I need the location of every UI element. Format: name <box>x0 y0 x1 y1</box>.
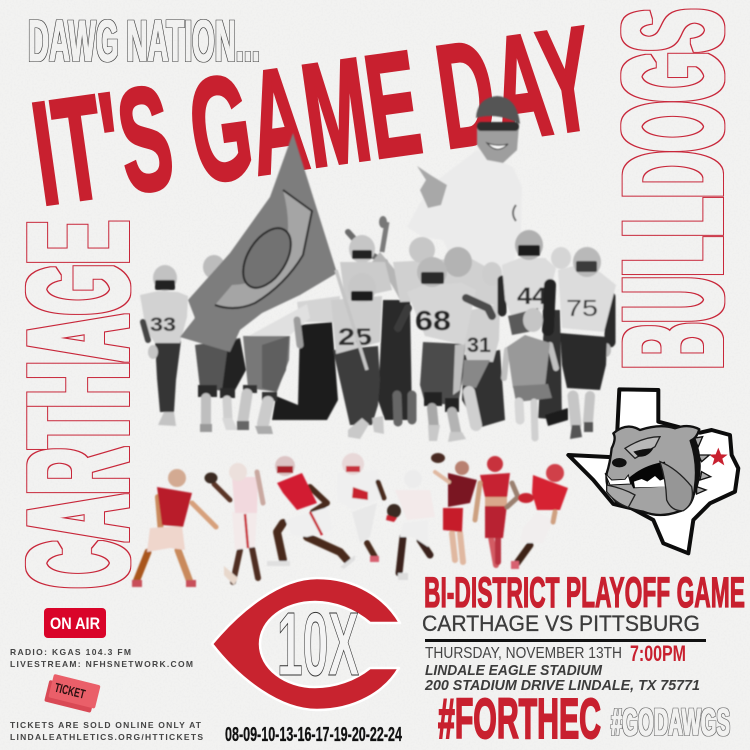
player 75 <box>548 247 616 439</box>
text: kickoff time: 7:00PM <box>630 641 686 666</box>
dark players behind the front row <box>272 216 571 428</box>
text: ticket info <box>10 720 203 742</box>
collar spikes <box>693 437 711 494</box>
team photo row: colour players <box>132 453 568 587</box>
player 68: 68 <box>415 305 451 336</box>
Texas outline <box>568 389 738 553</box>
player 33: 33 <box>150 315 176 336</box>
player 44: 44 <box>517 283 548 310</box>
icon: ticket <box>44 673 101 714</box>
hashtag: #FORTHEC: #FORTHEC <box>438 687 601 750</box>
player 75: 75 <box>566 295 598 321</box>
bulldog head <box>606 426 699 515</box>
logo: Texas with bulldog <box>568 389 738 553</box>
icon: On Air button <box>44 608 106 638</box>
jowl <box>660 462 692 511</box>
flag with C emblem <box>180 133 367 370</box>
player 25: 25 <box>338 324 372 351</box>
logo: red C with 10X: 10X <box>277 595 359 695</box>
player 44 <box>502 230 556 335</box>
kid in t-shirt <box>504 308 556 438</box>
text: radio and livestream: RADIO: KGAS 104.3 FM <box>10 647 131 657</box>
player running with ball <box>337 453 385 562</box>
player 1 passing <box>204 463 263 585</box>
subheading: Carthage vs Pittsburg: CARTHAGE VS PITTSBURG <box>422 611 700 636</box>
text: date: THURSDAY, NOVEMBER 13TH <box>425 645 622 662</box>
player with ball and pink wristband <box>386 470 435 580</box>
icon: ticket: TICKET <box>53 680 87 702</box>
player 33 <box>140 265 188 426</box>
player number 2 <box>475 456 518 565</box>
player 68 <box>398 257 492 442</box>
icon: On Air button: ON AIR <box>50 614 100 633</box>
player 8 <box>267 456 355 569</box>
photo: team running out with flag <box>140 133 616 442</box>
photo: coach pointing <box>407 96 522 280</box>
divider line <box>425 639 706 642</box>
mouth with teeth <box>628 462 666 488</box>
quarterback <box>431 453 477 562</box>
player 31 <box>461 304 500 425</box>
brow and eye <box>625 437 660 458</box>
player 15 <box>132 469 216 587</box>
text: radio and livestream <box>10 647 193 669</box>
heading: Dawg Nation: DAWG NATION... <box>28 9 260 74</box>
player 31: 31 <box>467 334 491 357</box>
player 25 <box>331 235 392 439</box>
text: venue <box>424 662 700 694</box>
player number 0 <box>511 464 568 569</box>
text: venue: 200 STADIUM DRIVE LINDALE, TX 75771 <box>424 677 700 694</box>
text: radio and livestream: LIVESTREAM: NFHSNETWORK.COM <box>10 659 193 669</box>
player with white jersey under flag <box>237 304 310 434</box>
logo: red C with 10X <box>212 578 400 710</box>
text: ticket info: TICKETS ARE SOLD ONLINE ONLY AT <box>10 720 202 730</box>
player behind flag, left <box>192 255 246 432</box>
red star <box>709 448 728 465</box>
text: ticket info: LINDALEATHLETICS.ORG/HTTICKETS <box>10 732 203 742</box>
text: venue: LINDALE EAGLE STADIUM <box>425 662 602 679</box>
text: jersey numbers: 08-09-10-13-16-17-19-20-22-24 <box>225 724 403 746</box>
